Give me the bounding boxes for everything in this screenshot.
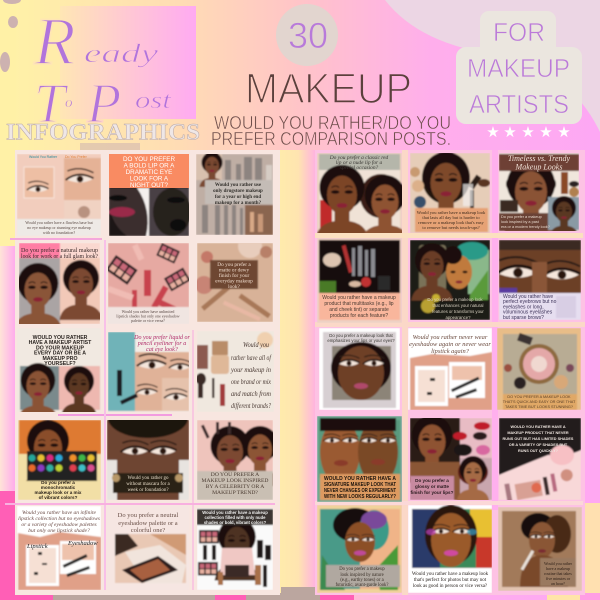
ready to post banner: ost (135, 88, 173, 114)
tile 27: never runs out: RUNS OUT QUICKLY? (518, 449, 559, 453)
tile 7: makeup artist vs pro: MAKEUP PRO (42, 356, 78, 362)
tile 21: eyebrows or eyelashes: voluminous eyelashes (503, 310, 553, 316)
tile 6: matte or dewy flatlay: Do you prefer a (217, 261, 251, 268)
tile 17: all-day hard to remove: that lasts all day but is harder to (422, 215, 480, 220)
tile 16: classic red or nude lip (317, 153, 402, 233)
ready to post banner: T (34, 73, 69, 135)
number 30 badge (276, 4, 338, 66)
tile 24: quick or stunning flatlay: DO YOU PREFER A MAKEUP LOOK (507, 395, 571, 399)
tile 23: eyeshadow or eyelash again: eyeshadow again or never wear (409, 341, 491, 348)
tile 28: natural or futuristic (317, 505, 402, 593)
tile 22: lips or eyes: emphasizes your lips or your eyes? (327, 338, 395, 343)
subtitle: PREFER COMPARISON POSTS. (211, 129, 451, 149)
tile 3: drugstore vs high end: makeup for a month? (215, 201, 262, 206)
tile 1: eyelids (17, 154, 101, 236)
tile 21: eyebrows or eyelashes: perfect eyebrows but no (503, 299, 557, 305)
tile 25: signature look or experiment: NEVER CHANGES OR EXPERIMENT (324, 488, 396, 494)
tile 2: bold lip or dramatic eye: DO YOU PREFER (123, 156, 175, 163)
tile 17: all-day hard to remove: Would you rather have a makeup look (417, 210, 486, 215)
tile 27: never runs out: WOULD YOU RATHER HAVE A (510, 425, 566, 429)
tile 22: lips or eyes: Do you prefer a makeup look that (329, 333, 394, 338)
tile 13: eyelash vs eyeshadow: Lipstick (26, 543, 48, 550)
tile 10: monochromatic vs vibrant: monochromatic (41, 485, 76, 490)
tile 21: eyebrows or eyelashes: but sparse brows? (503, 315, 544, 321)
tile 30: half and half portrait: five minutes or (546, 576, 571, 581)
tile 3: drugstore vs high end: for a year or high end (215, 195, 261, 200)
tile 24: quick or stunning flatlay: TAKES TIME BUT LOOKS STUNNING? (505, 405, 573, 409)
tile 13: eyelash vs eyeshadow: Would you rather have an infinite (22, 509, 96, 516)
tile 15: nude or vibrant collection (197, 508, 273, 590)
tile 6: matte or dewy flatlay: matte or dewy (219, 268, 249, 274)
tile 3: drugstore vs high end: Would you rather use (215, 183, 262, 188)
ready to post banner (33, 3, 196, 135)
subtitle: WOULD YOU RATHER/DO YOU (214, 113, 451, 133)
for makeup artists badge: ARTISTS (469, 89, 569, 119)
tile 29: photos vs in person: Would you rather have a makeup look (412, 572, 489, 577)
tile 17: all-day hard to remove: to remove but needs touch-ups? (422, 225, 480, 230)
tile 19: multitasking product: and cheek tint) or separate (329, 307, 389, 313)
tile 20: enhance or transform: Do you prefer a makeup look (427, 297, 483, 302)
tile 28: natural or futuristic: Do you prefer a makeup (339, 567, 385, 572)
tile 6: matte or dewy flatlay: finish for your (219, 272, 250, 279)
number 30 badge: 30 (288, 15, 328, 56)
tile 13: eyelash vs eyeshadow (17, 506, 101, 590)
five star rating (486, 124, 571, 141)
tile 9: one brand or mix: Would you (243, 340, 269, 349)
for makeup artists badge (456, 11, 582, 124)
tile 20: enhance or transform: that enhances your natural (433, 303, 483, 308)
tile 18: timeless vs trendy: Makeup Looks (515, 162, 562, 172)
tile 30: half and half portrait: Would you rather (544, 561, 573, 566)
tile 20: enhance or transform: features or transforms your (432, 309, 484, 314)
tile 14: neutral palette: eyeshadow palette or a (118, 520, 178, 527)
tile 9: one brand or mix: your makeup in (230, 365, 271, 374)
main title: MAKEUP (245, 65, 412, 113)
tile 14: neutral palette (114, 512, 187, 584)
five star rating: ★ (503, 124, 517, 141)
tile 18: timeless vs trendy: look inspired by a past (501, 220, 540, 224)
tile 2: bold lip or dramatic eye: LOOK FOR A (130, 176, 169, 182)
tile 15: nude or vibrant collection: shades or bold, vibrant colors? (204, 520, 267, 525)
tile 9: one brand or mix: and match from (231, 389, 271, 398)
tile 20: enhance or transform (410, 240, 490, 320)
tile 2: bold lip or dramatic eye: DRAMATIC EYE (126, 169, 172, 176)
tile 18: timeless vs trendy: Timeless vs. Trendy (508, 154, 571, 163)
five star rating: ★ (486, 124, 500, 141)
tile 6: matte or dewy flatlay (197, 243, 273, 322)
tile 2: bold lip or dramatic eye: NIGHT OUT? (130, 182, 169, 189)
tile 24: quick or stunning flatlay: THAT'S QUICK AND EASY OR ONE THAT (503, 400, 576, 404)
tile 17: all-day hard to remove (410, 152, 490, 233)
tile 19: multitasking product (317, 238, 402, 323)
tile 23: eyeshadow or eyelash again: Would you rather never wear (413, 334, 488, 341)
tile 4: natural vs full glam: Do you prefer a natural makeup (21, 247, 98, 254)
ready to post banner: o (65, 95, 73, 111)
decorative blobs (0, 0, 140, 151)
tile 25: signature look or experiment (317, 416, 402, 502)
tile 26: glossy or matte lips: glossy or matte (415, 484, 449, 489)
tile 25: signature look or experiment: SIGNATURE MAKEUP LOOK THAT (324, 482, 396, 488)
tile 26: glossy or matte lips: Do you prefer a (415, 478, 449, 483)
panel: left collage backing (5, 150, 280, 595)
tile 12: celebrity or trend: MAKEUP TREND? (212, 490, 258, 496)
tile 25: signature look or experiment: WOULD YOU RATHER HAVE A (324, 476, 396, 482)
tile 29: photos vs in person: that's perfect for photos but may not (414, 578, 487, 583)
tile 3: drugstore vs high end (196, 152, 273, 235)
tile 18: timeless vs trendy: Do you prefer a makeup (501, 215, 542, 219)
tile 16: classic red or nude lip: special occasion? (340, 165, 379, 171)
tile 25: signature look or experiment: WITH NEW LOOKS REGULARLY? (324, 494, 396, 500)
tile 7: makeup artist vs pro: DO YOUR MAKEUP (36, 345, 85, 351)
tile 3: drugstore vs high end: only drugstore makeup (213, 189, 263, 194)
tile 29: photos vs in person: look as good in person or vice versa? (413, 584, 488, 589)
tile 7: makeup artist vs pro (18, 335, 100, 412)
tile 2: bold lip or dramatic eye: A BOLD LIP OR A (124, 162, 175, 170)
for makeup artists badge: MAKEUP (467, 53, 570, 83)
tile 1: eyelids: Would you rather have a flawless base but (25, 220, 94, 225)
tile 20: enhance or transform: appearance? (445, 315, 471, 320)
tile 13: eyelash vs eyeshadow: Eyeshadow (67, 540, 98, 547)
tile 27: never runs out (499, 418, 581, 502)
tile 29: photos vs in person (408, 505, 492, 593)
tile 5: lipstick flatlay: Would you rather have unlimited (122, 309, 174, 314)
tile 1: eyelids: Do You Prefer (65, 155, 88, 159)
ready to post banner: eady (84, 39, 159, 68)
tile 10: monochromatic vs vibrant (18, 420, 101, 500)
tile 19: multitasking product: products for each feature? (330, 313, 388, 319)
tile 12: celebrity or trend: BY A CELEBRITY OR A (206, 484, 264, 490)
for makeup artists badge: FOR (493, 17, 545, 47)
tile 8: liquid or pencil eyeliner: Do you prefer liquid or (133, 334, 191, 341)
tile 27: never runs out: OR A VARIETY OF SHADES BUT (509, 443, 568, 447)
five star rating: ★ (557, 124, 571, 141)
tile 18: timeless vs trendy (499, 153, 579, 231)
tile 11: mascara or foundation: week or foundation? (127, 488, 169, 493)
tile 11: mascara or foundation (107, 420, 189, 500)
tile 1: eyelids: with no foundation? (43, 230, 75, 235)
five star rating: ★ (539, 124, 553, 141)
tile 22: lips or eyes (319, 328, 400, 410)
tile 8: liquid or pencil eyeliner: pencil eyeliner for a (137, 340, 186, 347)
tile 13: eyelash vs eyeshadow: lipstick collection but no eyeshadows (18, 516, 100, 522)
tile 6: matte or dewy flatlay: look? (228, 284, 241, 290)
tile 7: makeup artist vs pro: YOURSELF? (44, 361, 76, 367)
tile 19: multitasking product: product that multitasks (e.g., lip (324, 301, 394, 307)
tile 21: eyebrows or eyelashes: eyelashes or long, (503, 304, 544, 310)
tile 23: eyeshadow or eyelash again (408, 328, 492, 410)
tile 16: classic red or nude lip: Do you prefer a classic red (329, 154, 389, 161)
tile 16: classic red or nude lip: lip or a nude lip for a (336, 159, 383, 166)
tile 18: timeless vs trendy: era or a modern trendy look? (501, 225, 550, 229)
tile 28: natural or futuristic: (e.g., earthy tones) or a (340, 578, 385, 583)
tile 21: eyebrows or eyelashes (496, 240, 581, 321)
tile 4: natural vs full glam (19, 243, 100, 324)
tile 17: all-day hard to remove: remove or a makeup look that's easy (418, 220, 485, 225)
tile 27: never runs out: RUNS OUT BUT HAS LIMITED SHADES (503, 437, 574, 441)
tile 8: liquid or pencil eyeliner (108, 332, 191, 412)
tile 5: lipstick flatlay: lipstick shades but only one eyeshadow (116, 314, 180, 318)
tile 8: liquid or pencil eyeliner: cat eye look? (146, 347, 178, 353)
tile 1: eyelids: Would You Rather (29, 155, 58, 159)
tile 14: neutral palette: Do you prefer a neutral (118, 512, 179, 519)
tile 9: one brand or mix: different brands? (231, 401, 271, 410)
tile 9: one brand or mix: one brand or mix (231, 377, 272, 386)
tile 19: multitasking product: Would you rather have a makeup (322, 295, 396, 301)
panel: right collage backing (315, 150, 585, 595)
tile 24: quick or stunning flatlay (497, 328, 581, 410)
tile 30: half and half portrait: have a makeup (546, 566, 570, 571)
tile 6: matte or dewy flatlay: everyday makeup (215, 278, 253, 284)
tile 30: half and half portrait: routine that takes (544, 571, 572, 576)
tile 21: eyebrows or eyelashes: Would you rather have (503, 294, 553, 300)
infographics label: INFOGRAPHICS (6, 120, 200, 144)
tile 13: eyelash vs eyeshadow: or a variety of eyeshadow palettes (21, 521, 97, 528)
five star rating: ★ (521, 124, 535, 141)
tile 30: half and half portrait (498, 507, 582, 591)
tile 12: celebrity or trend: MAKEUP LOOK INSPIRED (202, 478, 268, 484)
tile 10: monochromatic vs vibrant: Do you prefer a (41, 480, 75, 485)
tile 15: nude or vibrant collection: Would you rather have a makeup (202, 510, 268, 515)
tile 10: monochromatic vs vibrant: makeup look or a mix (35, 490, 82, 495)
tile 4: natural vs full glam: look for work or a full glam look? (21, 253, 98, 260)
tile 7: makeup artist vs pro: WOULD YOU RATHER (33, 335, 88, 341)
tile 12: celebrity or trend: DO YOU PREFER A (211, 472, 259, 478)
tile 30: half and half portrait: an hour? (551, 581, 565, 586)
tile 7: makeup artist vs pro: HAVE A MAKEUP ARTIST (29, 340, 92, 346)
tile 14: neutral palette: colorful one? (131, 527, 165, 534)
tile 28: natural or futuristic: look inspired by nature (340, 573, 384, 578)
ready to post banner: R (33, 3, 76, 79)
tile 7: makeup artist vs pro: EVERY DAY OR BE A (34, 351, 86, 357)
tile 5: lipstick flatlay: palette or vice versa? (131, 318, 165, 323)
subtitle (211, 113, 451, 149)
tile 15: nude or vibrant collection: collection filled with only nude (205, 515, 266, 520)
tile 28: natural or futuristic: futuristic, avant-garde look? (336, 583, 388, 588)
tile 11: mascara or foundation: Would you rather go (127, 476, 169, 481)
tile 26: glossy or matte lips (408, 415, 492, 501)
tile 9: one brand or mix (196, 331, 274, 412)
tile 27: never runs out: MAKEUP PRODUCT THAT NEVER (507, 431, 569, 435)
tile 2: bold lip or dramatic eye (109, 154, 191, 236)
tile 5: lipstick flatlay (106, 243, 191, 324)
tile 13: eyelash vs eyeshadow: but only one lipstick shade? (28, 528, 90, 534)
tile 10: monochromatic vs vibrant: of vibrant colors? (39, 495, 78, 500)
tile 11: mascara or foundation: without mascara for a (126, 482, 171, 487)
ready to post banner: P (86, 73, 121, 135)
tile 26: glossy or matte lips: finish for your lips? (411, 490, 454, 495)
tile 23: eyeshadow or eyelash again: lipstick again? (431, 348, 470, 355)
tile 12: celebrity or trend (197, 420, 273, 500)
tile 1: eyelids: no eye makeup or stunning eye makeup (27, 225, 91, 230)
tile 9: one brand or mix: rather have all of (231, 353, 272, 362)
